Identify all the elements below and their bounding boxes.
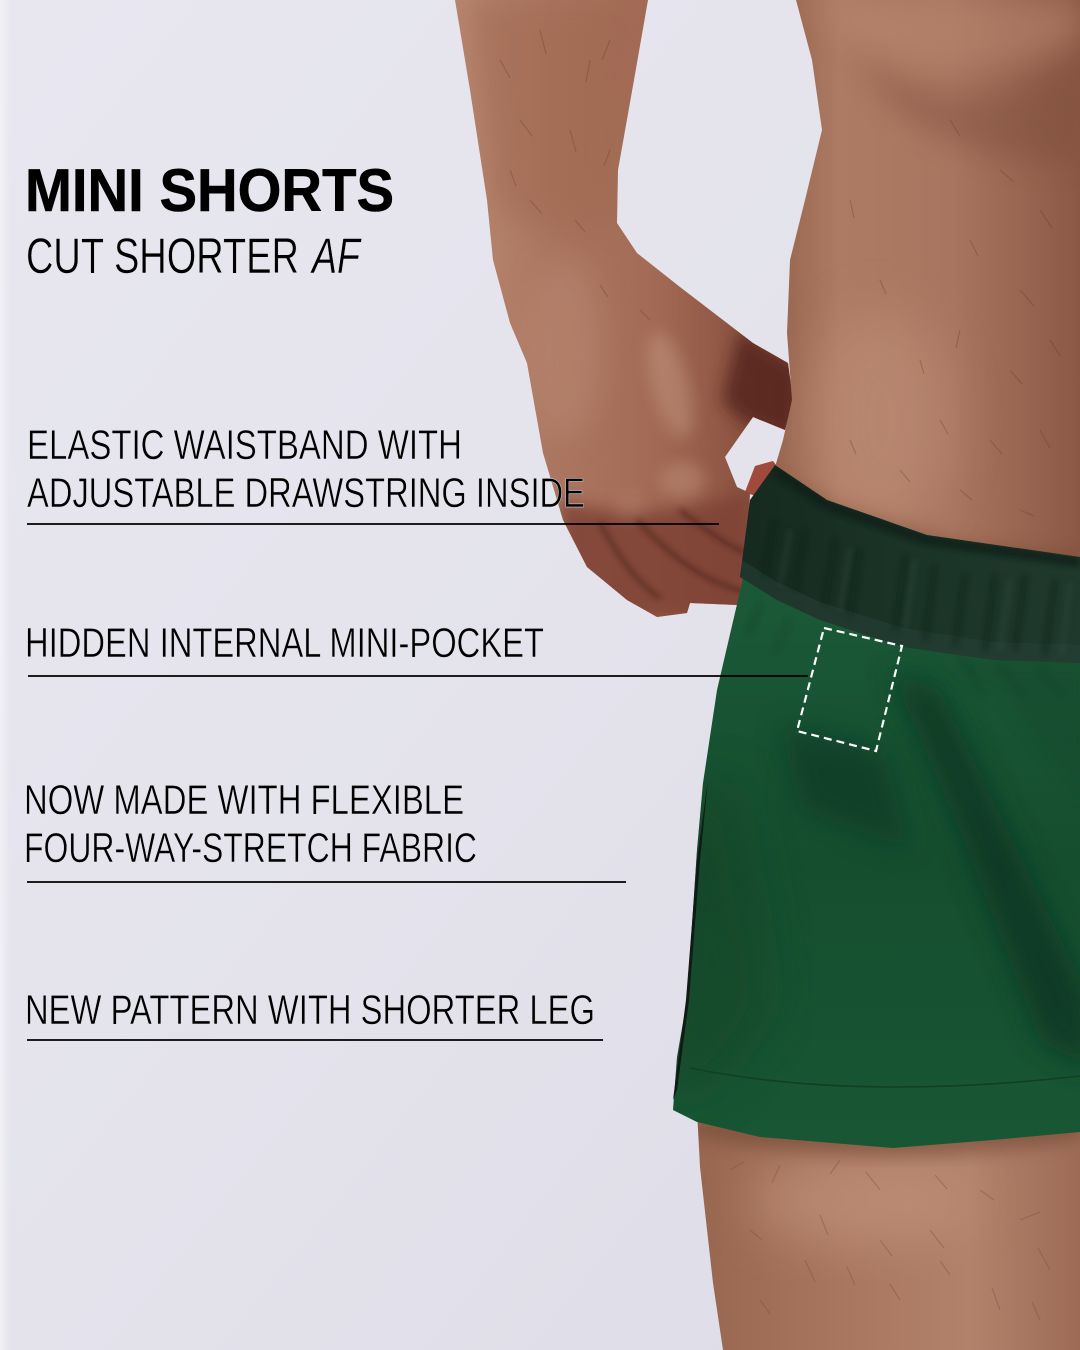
shorts body bbox=[660, 560, 1080, 1160]
subtitle: AF bbox=[310, 228, 362, 284]
subtitle: CUT SHORTER bbox=[26, 228, 299, 284]
finger behind waistband bbox=[745, 461, 780, 498]
callout: fabric: NOW MADE WITH FLEXIBLE bbox=[24, 776, 464, 823]
title: MINI SHORTS bbox=[25, 157, 394, 224]
callout: pocket: HIDDEN INTERNAL MINI-POCKET bbox=[25, 619, 544, 666]
leg bbox=[698, 1122, 1080, 1350]
photo: model wearing shorts bbox=[450, 0, 1080, 1350]
waistband bbox=[735, 460, 1080, 675]
callout: leg: NEW PATTERN WITH SHORTER LEG bbox=[25, 986, 595, 1033]
torso bbox=[776, 0, 1080, 557]
shorts bbox=[660, 460, 1080, 1160]
callout: fabric bbox=[24, 776, 626, 882]
hem stitch bbox=[690, 1068, 1080, 1087]
callout: fabric: FOUR-WAY-STRETCH FABRIC bbox=[24, 824, 477, 871]
callout: waistband: ELASTIC WAISTBAND WITH bbox=[27, 421, 462, 468]
callout: waistband: ADJUSTABLE DRAWSTRING INSIDE bbox=[27, 469, 585, 516]
arm and hand bbox=[450, 0, 800, 620]
callout: waistband bbox=[27, 421, 719, 524]
side seam bbox=[673, 780, 708, 1100]
pocket outline (dashed) bbox=[797, 628, 902, 751]
left edge highlight bbox=[0, 0, 10, 1350]
